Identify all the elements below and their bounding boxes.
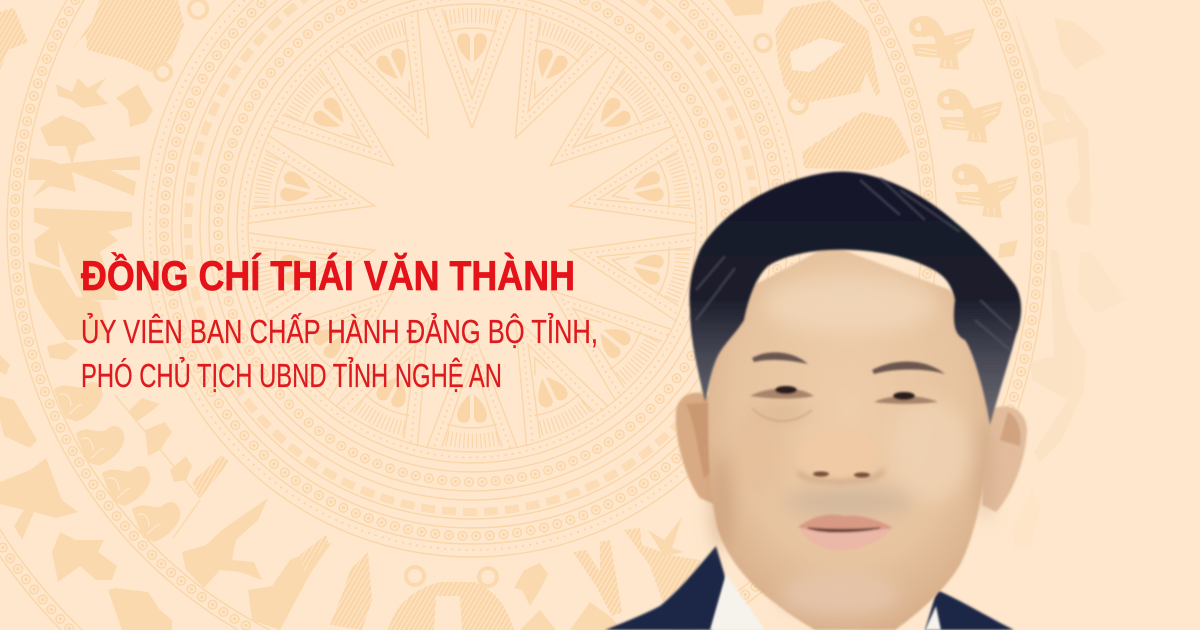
eyebrows bbox=[752, 352, 945, 374]
top-right boat bbox=[775, 0, 880, 104]
subtitle: PHÓ CHỦ TỊCH UBND TỈNH NGHỆ AN bbox=[81, 357, 502, 394]
fourteen-point star bbox=[248, 9, 696, 447]
subtitle: ỦY VIÊN BAN CHẤP HÀNH ĐẢNG BỘ TỈNH, bbox=[81, 313, 598, 350]
shirt collar bbox=[710, 574, 941, 630]
portrait bbox=[605, 172, 1027, 630]
nostrils bbox=[813, 471, 870, 478]
hair highlights bbox=[696, 178, 1012, 350]
title: ĐỒNG CHÍ THÁI VĂN THÀNH bbox=[81, 251, 575, 299]
bottom boat bbox=[388, 582, 514, 630]
top-left boat bbox=[72, 0, 184, 72]
suit bbox=[605, 546, 1014, 630]
ears bbox=[676, 393, 1027, 512]
eyes bbox=[750, 386, 938, 421]
right fade bbox=[1040, 0, 1160, 630]
hair bbox=[689, 172, 1021, 425]
mouth bbox=[798, 514, 893, 550]
subtitle bbox=[81, 313, 598, 394]
nose bbox=[798, 431, 884, 482]
outer faded bird bbox=[1012, 7, 1126, 548]
face bbox=[708, 245, 990, 630]
face shading bbox=[713, 275, 990, 617]
